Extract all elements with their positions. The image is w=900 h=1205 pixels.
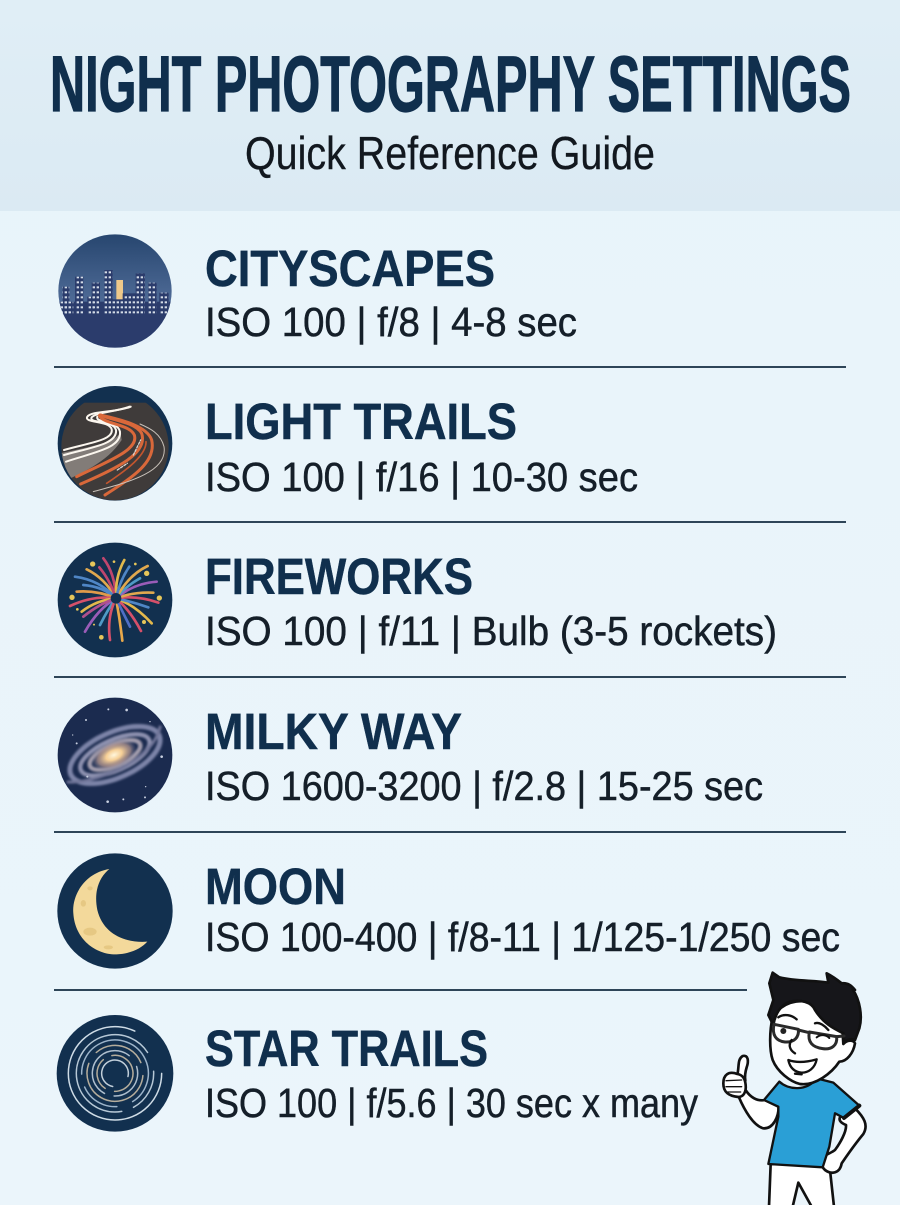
icon: city skyline <box>57 234 173 352</box>
heading: star trails: STAR TRAILS <box>205 1020 488 1077</box>
thumb <box>737 1056 748 1081</box>
hair <box>768 973 861 1043</box>
row: cityscapes <box>57 234 577 352</box>
head <box>770 1001 855 1084</box>
heading: fireworks: FIREWORKS <box>205 548 473 605</box>
finger lines <box>726 1080 742 1092</box>
fist <box>723 1073 746 1097</box>
icon: star trails <box>57 1015 173 1132</box>
header band <box>0 0 900 211</box>
row: fireworks <box>58 543 777 657</box>
row: moon <box>57 853 840 969</box>
subtitle: Quick Reference Guide <box>245 127 655 179</box>
t-shirt <box>764 1078 859 1167</box>
icon: fireworks burst <box>58 543 172 657</box>
right arm on hip <box>821 1108 866 1173</box>
row: star trails <box>57 1015 698 1132</box>
heading: light trails: LIGHT TRAILS <box>205 393 517 450</box>
heading: moon: MOON <box>205 858 346 915</box>
settings: star trails: ISO 100 | f/5.6 | 30 sec x many <box>205 1080 698 1126</box>
settings: light trails: ISO 100 | f/16 | 10-30 sec <box>205 454 638 500</box>
icon: spiral galaxy <box>56 698 173 812</box>
mascot: winking man giving thumbs up <box>723 973 866 1205</box>
settings: fireworks: ISO 100 | f/11 | Bulb (3-5 rockets) <box>205 608 777 654</box>
heading: milky way: MILKY WAY <box>205 703 462 760</box>
settings: cityscapes: ISO 100 | f/8 | 4-8 sec <box>205 299 577 345</box>
left arm <box>739 1091 779 1128</box>
row: light trails <box>58 386 638 503</box>
icon: light trails road <box>58 386 172 503</box>
glasses <box>773 1024 844 1049</box>
settings: milky way: ISO 1600-3200 | f/2.8 | 15-25 sec <box>205 763 763 809</box>
row: milky way <box>56 698 763 812</box>
sleeve cuff <box>844 1106 859 1118</box>
eyebrows and nose <box>778 1015 828 1074</box>
eye and wink <box>780 1028 829 1038</box>
heading: cityscapes: CITYSCAPES <box>205 240 495 297</box>
settings: moon: ISO 100-400 | f/8-11 | 1/125-1/250 sec <box>205 914 840 960</box>
smile <box>788 1059 817 1073</box>
icon: crescent moon <box>57 853 173 969</box>
trousers <box>769 1164 834 1205</box>
